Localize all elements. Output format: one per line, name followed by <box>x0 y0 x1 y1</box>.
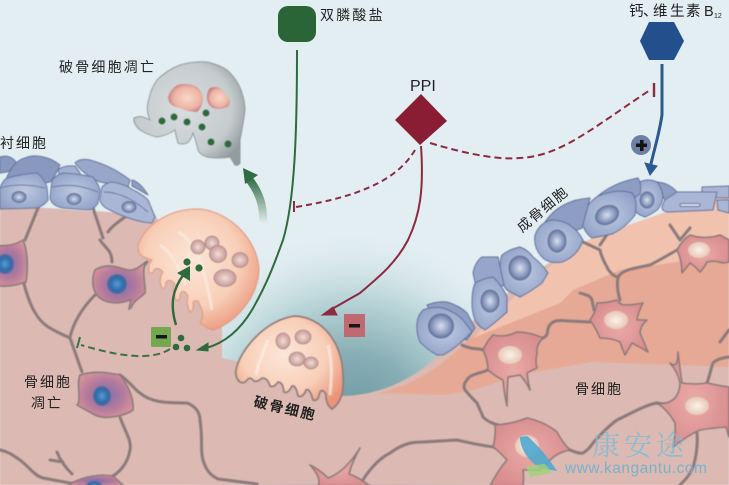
label: lining cells: 衬细胞 <box>0 135 48 151</box>
watermark text <box>564 424 707 477</box>
green fade arrow <box>243 168 263 222</box>
label: PPI: PPI <box>410 78 436 95</box>
apoptotic osteoclast <box>134 62 245 165</box>
calcium hexagon <box>640 22 684 60</box>
resorption pit shading <box>150 225 550 485</box>
lower osteoclast <box>236 316 343 409</box>
upper osteoclast <box>138 209 259 330</box>
PPI to osteoclast arrow <box>322 146 422 315</box>
label: osteoclast: 破骨细胞 <box>252 393 318 423</box>
nuclei <box>191 236 248 286</box>
label: calcium and B12: 12 <box>714 13 722 20</box>
osteocyte processes <box>0 208 729 485</box>
plus badge <box>631 135 651 155</box>
label: osteocyte apoptosis: 凋亡 <box>31 395 63 411</box>
minus badge, red <box>344 314 365 337</box>
label: calcium and B12: 钙、维生素B <box>629 3 714 20</box>
label: osteocyte: 骨细胞 <box>575 381 623 397</box>
bisphosphonate arrow <box>197 50 297 351</box>
label: bisphosphonate: 双膦酸盐 <box>320 7 385 23</box>
osteoblasts <box>417 178 729 355</box>
O3 <box>500 247 548 297</box>
calcium arrow <box>645 64 662 175</box>
O1 <box>427 302 475 340</box>
watermark text: 康安途 <box>592 424 688 464</box>
new bone layer <box>380 190 729 395</box>
lining cells <box>0 156 155 223</box>
minus badge, green <box>151 327 171 347</box>
inhibition of osteocyte, dashed <box>77 337 170 356</box>
label: osteoblast: 成骨细胞 <box>514 183 571 235</box>
O2 <box>473 257 504 295</box>
PPI dashed to calcium <box>430 83 654 158</box>
flat cells <box>702 186 729 198</box>
O5 <box>586 178 641 222</box>
label: apoptotic osteoclast: 破骨细胞凋亡 <box>59 59 156 75</box>
bone matrix <box>0 190 729 485</box>
green dots, uptake <box>173 258 203 351</box>
nuclei <box>168 84 203 112</box>
label: osteocyte apoptosis: 骨细胞 <box>24 374 72 390</box>
green dots <box>158 109 232 148</box>
osteocyte cells <box>0 235 729 485</box>
uptake arrow <box>173 266 190 325</box>
osteocytes, apoptotic (blue nuclei) <box>0 240 146 485</box>
watermark logo <box>520 436 557 477</box>
O6 <box>632 180 663 217</box>
PPI diamond <box>395 94 447 145</box>
newest osteoid band <box>473 190 729 338</box>
PPI dashed to bisphosphonate <box>294 150 415 212</box>
nuclei <box>276 330 318 369</box>
osteocytes, healthy (cream nuclei) <box>310 235 729 485</box>
watermark text: www.kangantu.com <box>564 460 707 477</box>
O4 <box>545 198 590 240</box>
bisphosphonate icon <box>278 6 316 42</box>
